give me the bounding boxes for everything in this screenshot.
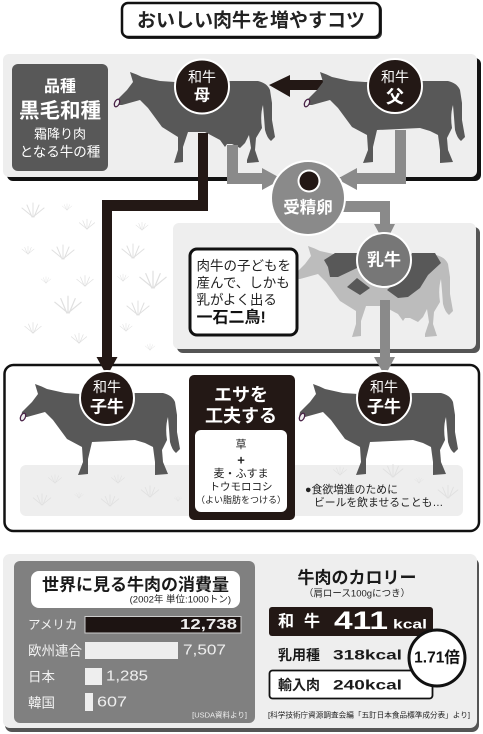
- cow: calf right: [298, 384, 458, 475]
- badge: father: 和牛: [381, 69, 409, 85]
- cow: calf left: [19, 384, 180, 475]
- callout: two birds: 産んで、しかも: [196, 276, 290, 290]
- chart title: 世界に見る牛肉の消費量: [42, 576, 229, 594]
- row: wagyu calories: kcal: [393, 616, 427, 632]
- calories heading: 牛肉のカロリー: [298, 568, 416, 588]
- note: beer: [305, 482, 443, 509]
- note: beer: ビールを飲ませることも…: [314, 496, 443, 509]
- badge: dairy cow: 乳牛: [367, 250, 401, 270]
- callout: two birds: 乳がよく出る: [196, 292, 277, 308]
- row: Korea: 韓国: [28, 696, 55, 710]
- badge: calf right: [357, 371, 411, 425]
- row: Japan: 日本: [28, 670, 55, 684]
- panel: beef consumption chart: [14, 561, 255, 723]
- row: Japan: [28, 668, 148, 685]
- row: dairy calories: 318kcal: [333, 648, 402, 662]
- panel: breed label: 黒毛和種: [19, 100, 101, 122]
- row: EU: 7,507: [183, 642, 226, 658]
- row: imported calories: [270, 670, 432, 698]
- arrow: mother to egg: [227, 145, 282, 190]
- row: Korea: [28, 693, 127, 711]
- panel: breed label: [12, 64, 108, 171]
- panel: feed: [189, 375, 295, 520]
- row: Japan: 1,285: [106, 668, 148, 684]
- badge: calf right: 子牛: [367, 398, 401, 416]
- row: USA: アメリカ: [28, 618, 77, 632]
- panel: dairy cow: [173, 223, 480, 353]
- calories heading: （肩ロース100gにつき）: [304, 588, 410, 600]
- row: imported calories: 240kcal: [333, 678, 402, 692]
- grass tufts: [22, 203, 166, 350]
- row: wagyu calories: 牛: [304, 612, 320, 630]
- panel: feed: 草: [236, 438, 246, 451]
- cow: dairy: [290, 246, 453, 337]
- badge: mother: 母: [194, 88, 210, 104]
- source: food table: [科学技術庁資源調査会編「五訂日本食品標準成分表」より]: [268, 710, 470, 720]
- row: dairy calories: 乳用種: [278, 647, 320, 663]
- row: dairy calories: [278, 647, 402, 663]
- badge: mother: 和牛: [188, 69, 216, 85]
- source: USDA: [USDA資料より]: [192, 710, 247, 720]
- row: USA: [28, 616, 241, 633]
- panel: breed label: 霜降り肉: [34, 126, 86, 142]
- panel: calves: [4, 365, 479, 531]
- arrow: dairy cow to calf: [374, 300, 395, 376]
- badge: father: [368, 59, 422, 113]
- panel: feed: エサを: [214, 385, 268, 405]
- row: wagyu calories: [269, 607, 433, 636]
- callout: two birds: 一石二鳥!: [196, 308, 266, 326]
- arrow: mother to calf: [96, 133, 208, 376]
- badge: dairy cow: [357, 233, 411, 287]
- panel: breed label: となる牛の種: [20, 144, 101, 160]
- row: Korea: 607: [97, 694, 127, 710]
- panel: breed label: 品種: [44, 78, 76, 96]
- row: USA: 12,738: [180, 616, 237, 633]
- badge: father: 父: [386, 87, 404, 107]
- panel: statistics: [3, 554, 479, 732]
- panel: feed: 麦・ふすま: [214, 467, 268, 480]
- callout: two birds: 肉牛の子どもを: [196, 258, 291, 274]
- row: wagyu calories: 和: [278, 612, 294, 630]
- panel: parents: [3, 54, 481, 181]
- cow: father: [303, 72, 465, 163]
- row: imported calories: 輸入肉: [278, 677, 320, 693]
- chart title: [31, 571, 240, 608]
- badge: calf left: 和牛: [93, 379, 121, 395]
- panel: feed: （よい脂肪をつける）: [196, 494, 286, 505]
- arrow: father to mother: [269, 75, 330, 97]
- callout: ratio: 1.71倍: [414, 648, 460, 666]
- title: おいしい肉牛を増やすコツ: [137, 10, 365, 32]
- badge: calf left: [80, 371, 134, 425]
- cow: mother: [113, 72, 275, 163]
- badge: calf left: 子牛: [90, 398, 124, 416]
- callout: two birds: [190, 249, 297, 335]
- panel: feed: 工夫する: [205, 406, 277, 426]
- panel: feed: +: [237, 452, 245, 468]
- badge: calf right: 和牛: [370, 379, 398, 395]
- chart title: (2002年 単位:1000トン): [130, 594, 231, 606]
- arrow: egg to dairy cow: [330, 201, 395, 244]
- fertilized egg: 受精卵: [283, 198, 333, 217]
- row: EU: 欧州連合: [28, 644, 82, 658]
- panel: feed: トウモロコシ: [210, 481, 272, 493]
- callout: ratio: [409, 630, 465, 686]
- calories heading: [298, 568, 416, 600]
- row: wagyu calories: 411: [334, 607, 388, 635]
- badge: mother: [175, 60, 229, 114]
- row: EU: [28, 642, 226, 659]
- title: [122, 3, 382, 39]
- note: beer: ●食欲増進のために: [305, 482, 398, 496]
- arrow: father to egg: [337, 130, 406, 190]
- fertilized egg: [270, 160, 346, 236]
